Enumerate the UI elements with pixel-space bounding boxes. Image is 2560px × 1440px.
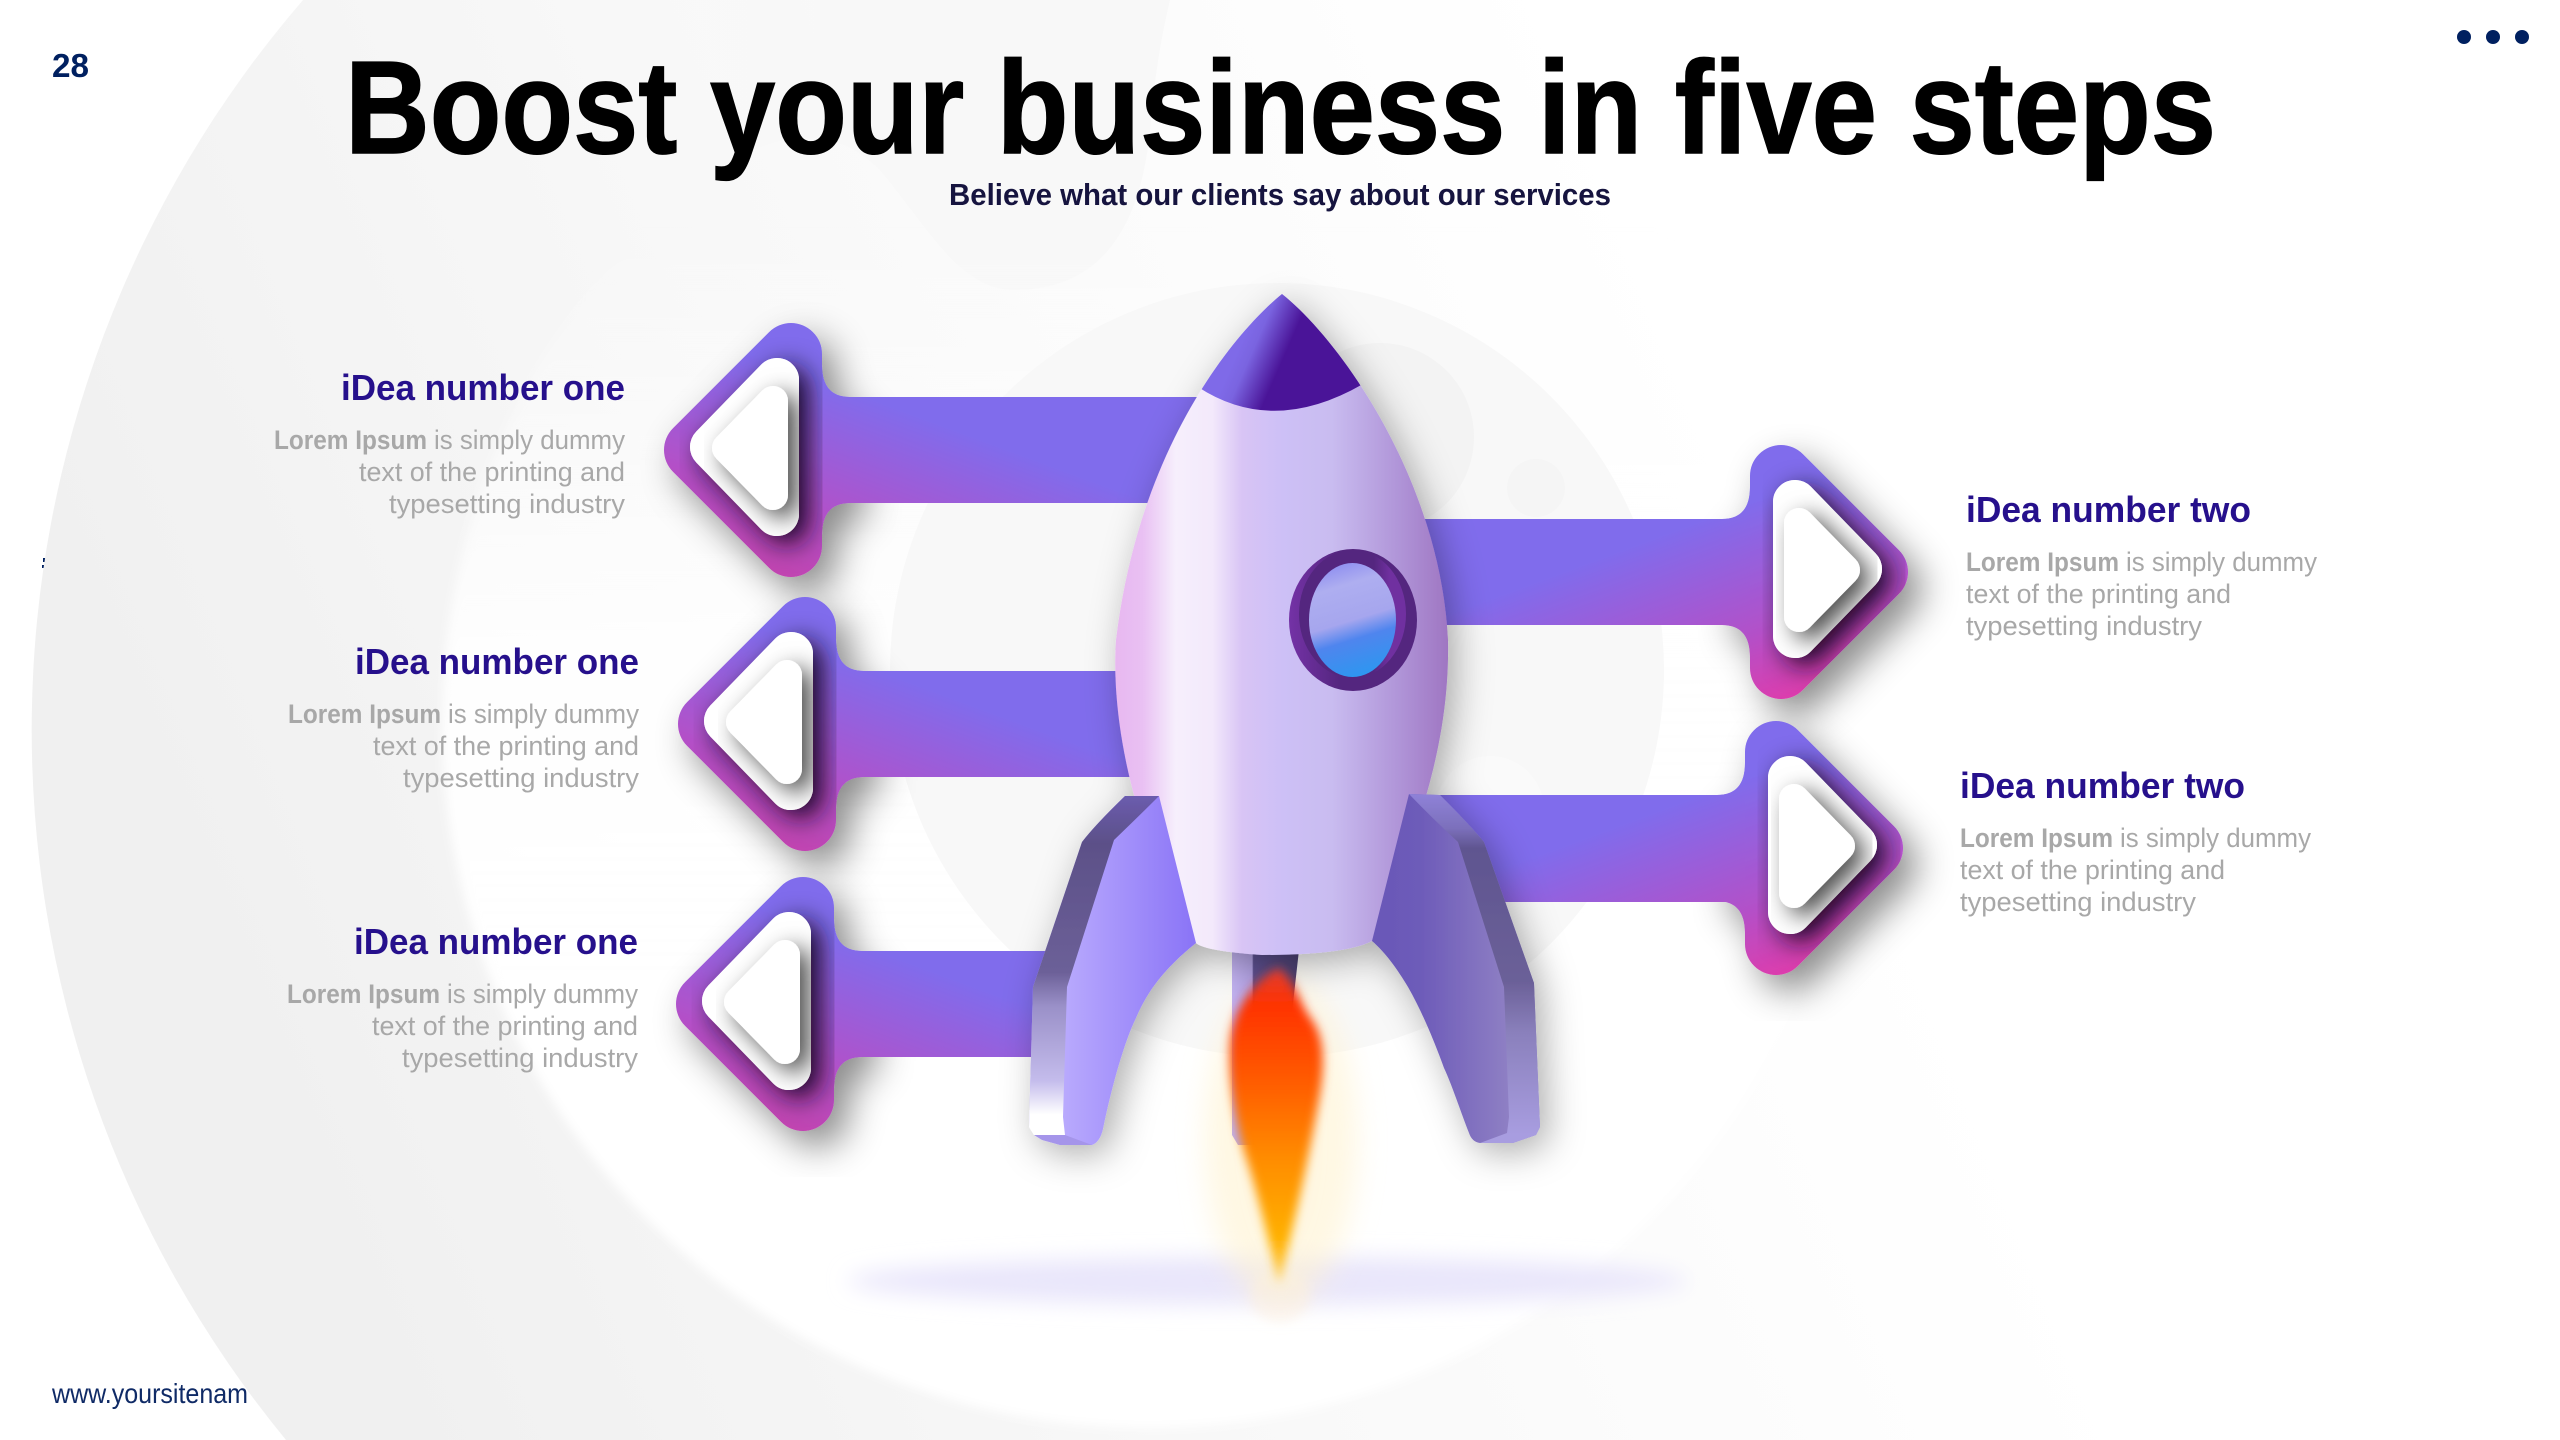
text block: idea two lower right: text of the printing and xyxy=(1960,855,2225,885)
left fin xyxy=(1029,796,1196,1145)
text block: idea one middle left: typesetting industry xyxy=(403,763,640,793)
text block: idea two upper right xyxy=(1966,489,2317,641)
page number: 28 xyxy=(52,47,89,84)
arrow: right two xyxy=(1420,752,1872,944)
text block: idea one bottom left xyxy=(287,921,639,1073)
text block: idea two upper right: text of the printing and xyxy=(1966,579,2231,609)
text block: idea two upper right: is simply dummy xyxy=(2126,547,2317,577)
rocket ground shadow xyxy=(848,1257,1688,1305)
arrow: right one xyxy=(1400,476,1877,668)
text block: idea two upper right: typesetting industry xyxy=(1966,611,2203,641)
text block: idea two upper right: iDea number two xyxy=(1966,489,2251,530)
website footer: www.yoursitenam xyxy=(51,1378,248,1409)
text block: idea one top left xyxy=(274,367,626,519)
menu dots icon xyxy=(2457,30,2529,44)
text block: idea two upper right: Lorem Ipsum xyxy=(1966,547,2119,577)
arrow: left one xyxy=(695,354,1252,546)
arrow: left three xyxy=(707,908,1064,1100)
text block: idea one middle left: iDea number one xyxy=(355,641,639,682)
text block: idea two lower right xyxy=(1960,765,2311,917)
arrow: left two xyxy=(709,628,1166,820)
text block: idea one bottom left: is simply dummy xyxy=(447,979,638,1009)
text block: idea one middle left xyxy=(288,641,640,793)
text block: idea one top left: is simply dummy xyxy=(434,425,625,455)
text block: idea one bottom left: iDea number one xyxy=(354,921,638,962)
rocket body xyxy=(1115,294,1448,955)
text block: idea one middle left: Lorem Ipsum xyxy=(288,699,441,729)
text block: idea two lower right: is simply dummy xyxy=(2120,823,2311,853)
rocket nose cone xyxy=(1202,294,1360,411)
background: clipped side marks xyxy=(37,558,49,626)
text block: idea one middle left: text of the printing and xyxy=(373,731,639,761)
text block: idea two lower right: Lorem Ipsum xyxy=(1960,823,2113,853)
text block: idea one top left: typesetting industry xyxy=(389,489,626,519)
moon crater large xyxy=(1286,343,1474,531)
text block: idea two lower right: iDea number two xyxy=(1960,765,2245,806)
background: soft white disc xyxy=(442,16,1854,1428)
rocket flame glow xyxy=(1205,975,1357,1305)
text block: idea one top left: text of the printing and xyxy=(359,457,625,487)
moon crater lower xyxy=(1436,756,1544,864)
text block: idea one middle left: is simply dummy xyxy=(448,699,639,729)
background: moon xyxy=(890,283,1664,1057)
rocket flame xyxy=(1230,968,1323,1284)
title: Boost your business in five steps xyxy=(345,34,2216,181)
rocket xyxy=(1029,280,1540,1145)
text block: idea two lower right: typesetting industry xyxy=(1960,887,2197,917)
rocket flame reflection xyxy=(1250,1270,1310,1322)
text block: idea one top left: iDea number one xyxy=(341,367,625,408)
rocket nozzle xyxy=(1232,950,1299,1145)
text block: idea one top left: Lorem Ipsum xyxy=(274,425,427,455)
text block: idea one bottom left: text of the printing and xyxy=(372,1011,638,1041)
text block: idea one bottom left: typesetting industry xyxy=(402,1043,639,1073)
rocket window xyxy=(1289,549,1417,691)
moon crater small xyxy=(1507,459,1565,517)
right fin xyxy=(1372,794,1540,1143)
subtitle: Believe what our clients say about our services xyxy=(949,177,1611,212)
text block: idea one bottom left: Lorem Ipsum xyxy=(287,979,440,1009)
background: top blob xyxy=(600,0,1170,290)
